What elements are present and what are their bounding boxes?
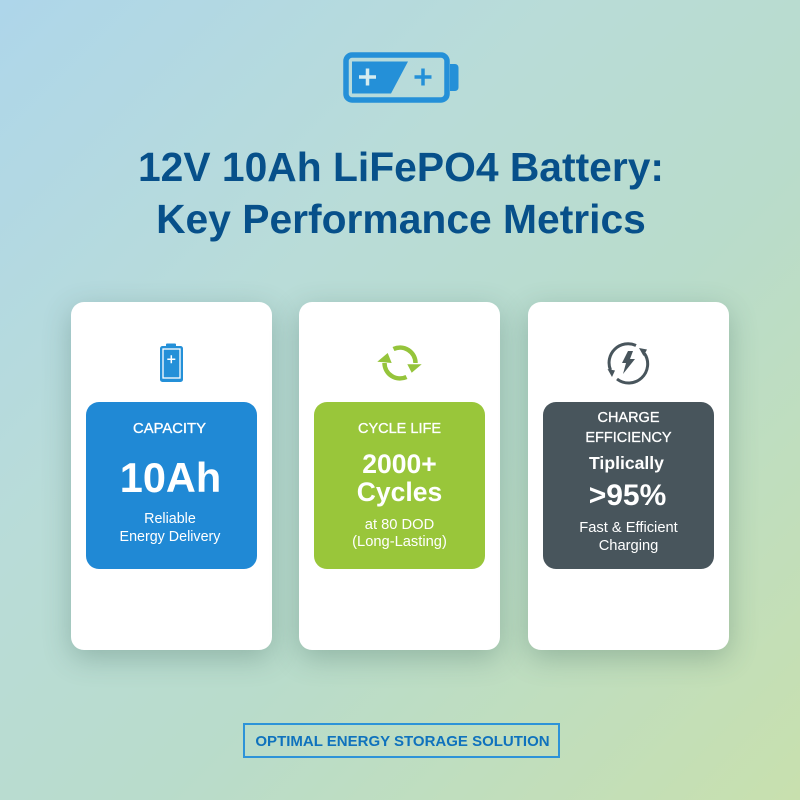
- title: 12V 10Ah LiFePO4 Battery:: [138, 144, 664, 190]
- charge efficiency label: EFFICIENCY: [585, 430, 672, 446]
- cycle life value: Cycles: [357, 477, 442, 507]
- icon: battery header: [343, 52, 458, 103]
- charge efficiency note: [579, 520, 678, 554]
- panel: capacity metric: [86, 402, 257, 569]
- icon: charge cycle bolt: [608, 342, 650, 384]
- panel: cycle life card: [299, 302, 500, 650]
- cycle life note: [352, 517, 447, 550]
- capacity note: Energy Delivery: [120, 529, 220, 545]
- footer tagline box: [243, 723, 560, 758]
- panel: capacity card: [71, 302, 272, 650]
- title: Key Performance Metrics: [156, 196, 646, 242]
- charge efficiency label: [585, 410, 672, 446]
- icon: small battery: [160, 344, 183, 382]
- footer tagline box: OPTIMAL ENERGY STORAGE SOLUTION: [255, 733, 550, 750]
- charge efficiency qualifier: Tiplically: [589, 453, 664, 473]
- capacity value: 10Ah: [120, 454, 221, 501]
- cycle life label: CYCLE LIFE: [358, 421, 441, 437]
- charge efficiency note: Fast & Efficient: [579, 520, 678, 536]
- cycle life note: (Long-Lasting): [352, 534, 447, 550]
- capacity note: Reliable: [144, 511, 196, 527]
- charge efficiency label: CHARGE: [597, 410, 660, 426]
- cycle life value: [357, 449, 442, 507]
- title: [138, 144, 664, 242]
- cycle life note: at 80 DOD: [365, 517, 434, 533]
- icon: cycle arrows: [377, 345, 422, 381]
- cycle life value: 2000+: [362, 449, 437, 479]
- capacity label: CAPACITY: [133, 421, 206, 437]
- panel: cycle life metric: [314, 402, 485, 569]
- panel: charge efficiency card: [528, 302, 729, 650]
- panel: charge efficiency metric: [543, 402, 714, 569]
- charge efficiency note: Charging: [599, 538, 658, 554]
- charge efficiency value: >95%: [589, 479, 666, 512]
- capacity note: [120, 511, 220, 545]
